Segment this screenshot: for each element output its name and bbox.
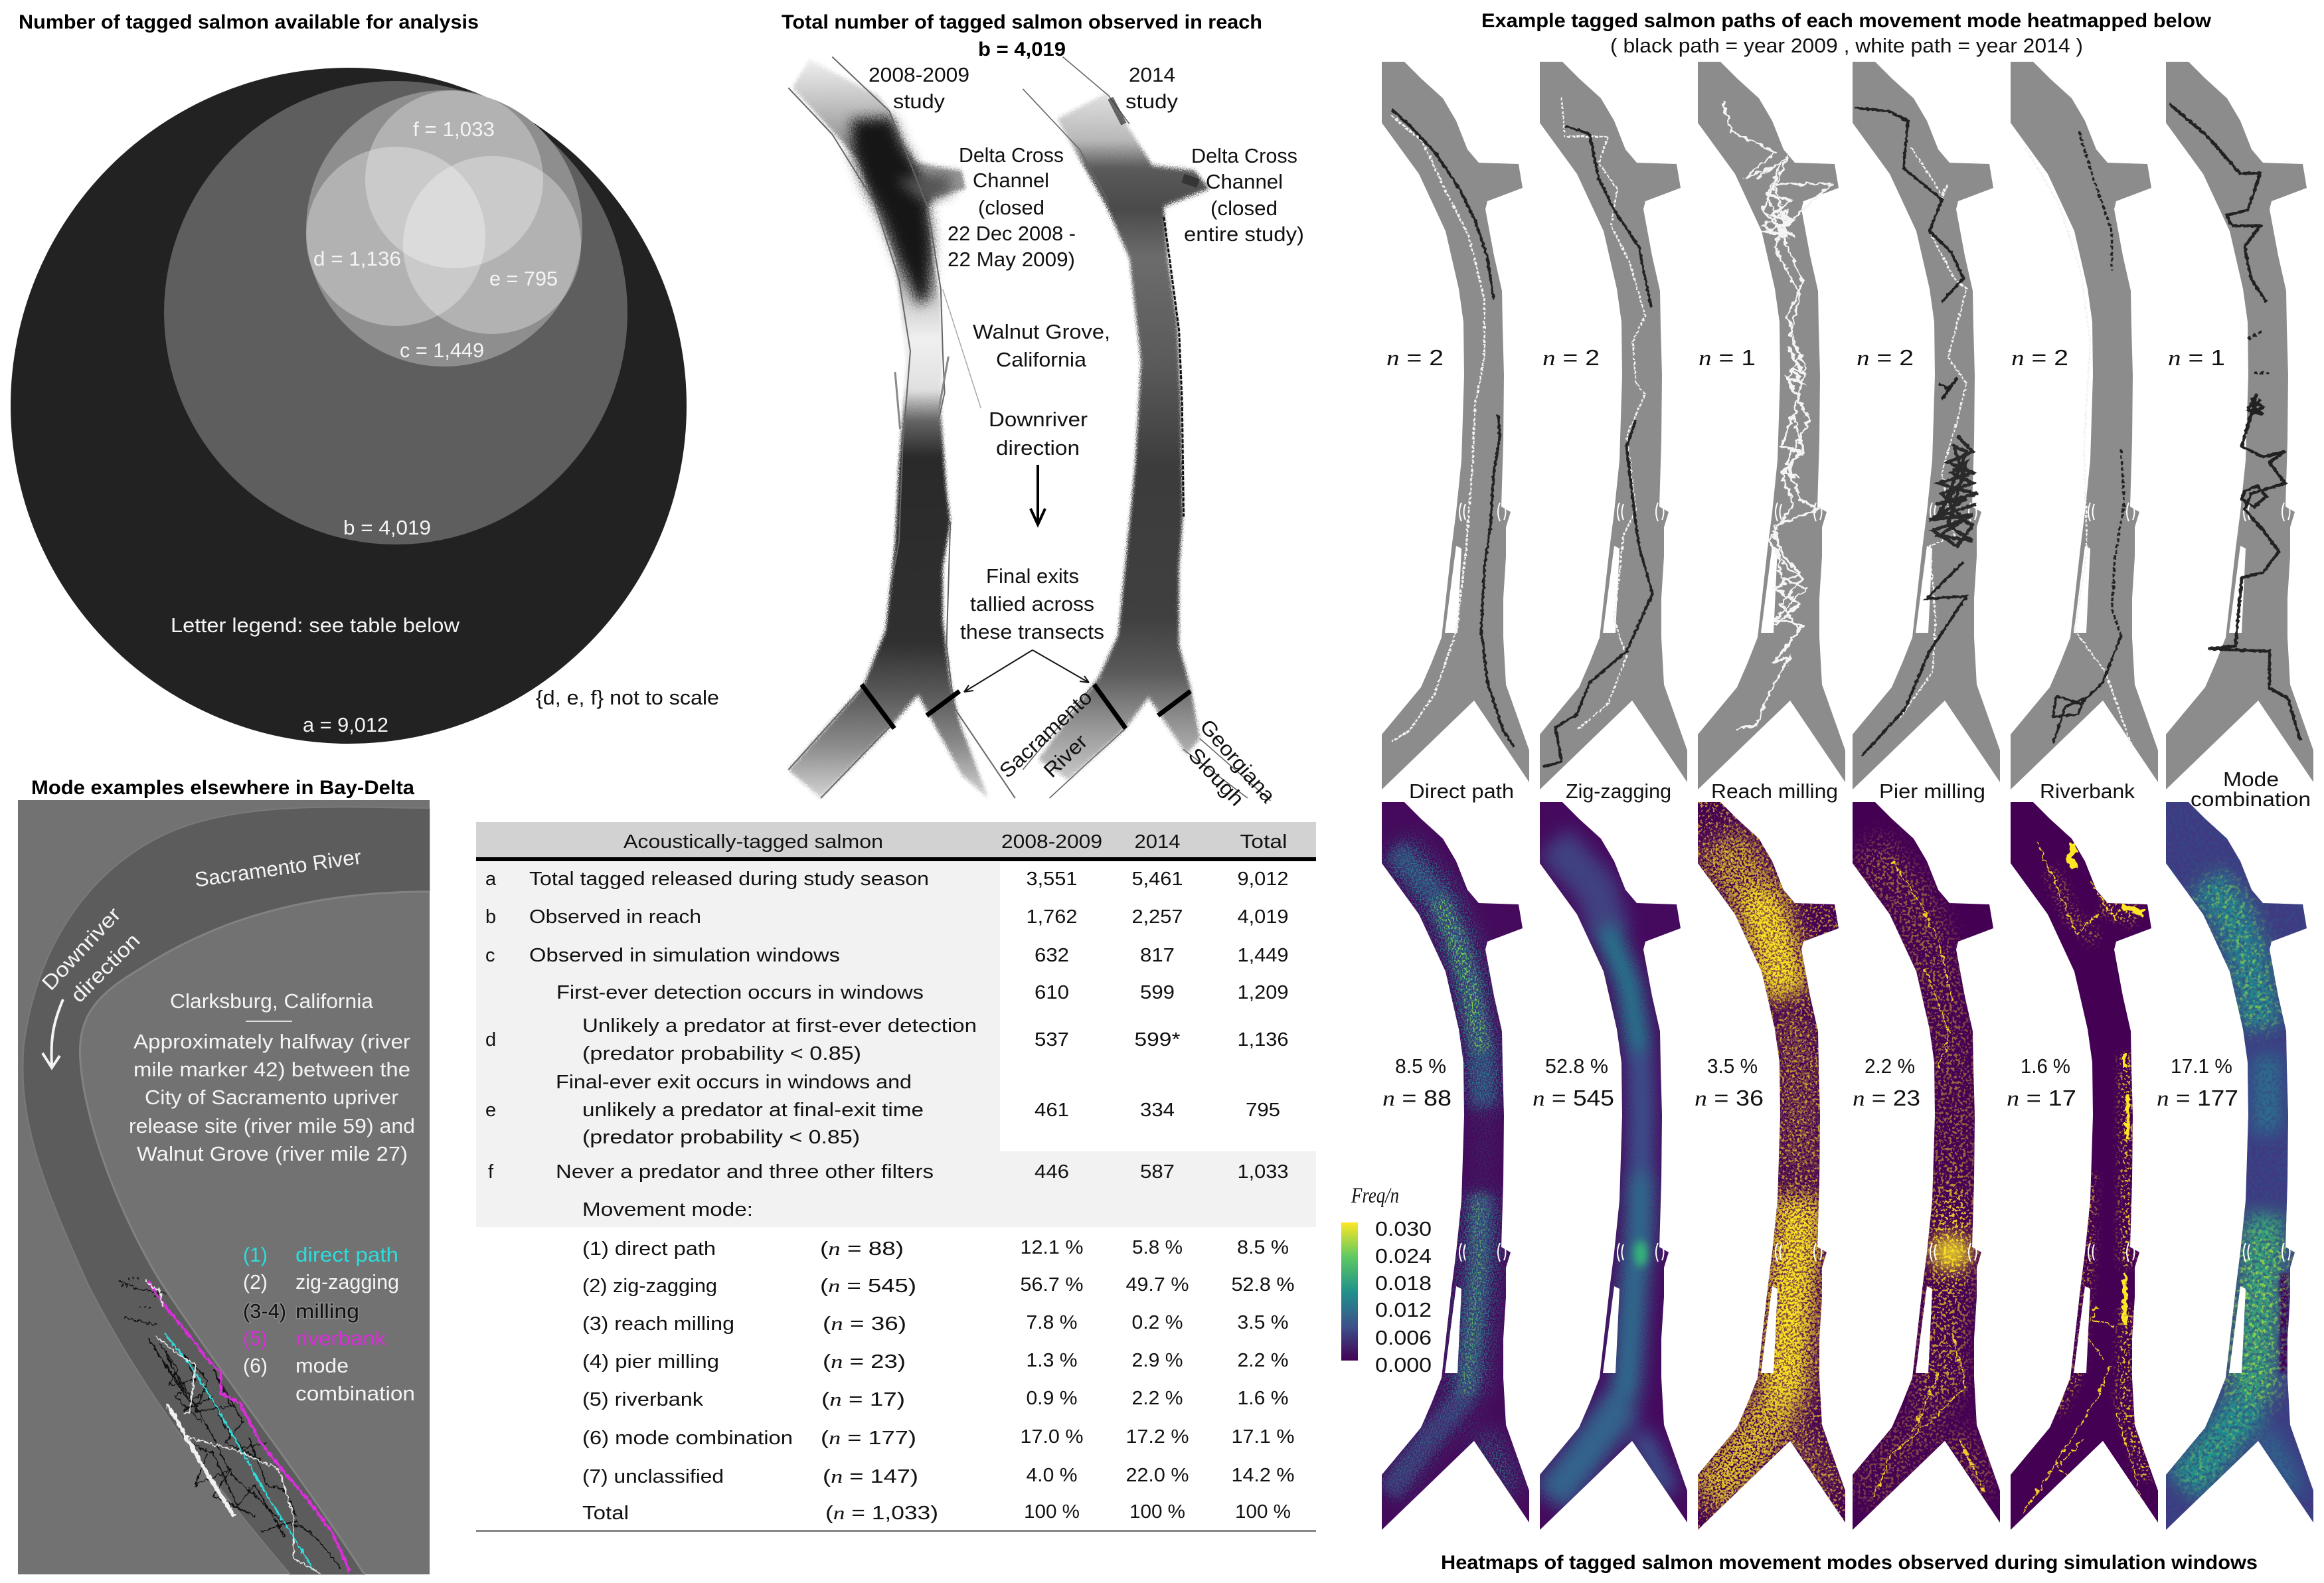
subheading: b count: b = 4,019 xyxy=(978,39,1066,60)
mode row 7: 14.2 % xyxy=(1231,1465,1295,1486)
row e: e xyxy=(485,1100,496,1121)
n labels on path panels xyxy=(1386,345,2225,371)
text block: Clarksburg location: mile marker 42) between the xyxy=(133,1058,410,1081)
row c: c xyxy=(485,945,495,966)
mode row 2: 56.7 % xyxy=(1020,1274,1084,1295)
legend: path colours: (5) xyxy=(243,1327,268,1350)
colour scale legend: 0.000 xyxy=(1375,1353,1432,1376)
row f: 587 xyxy=(1140,1161,1175,1183)
label: Delta Cross Channel closed dates: 22 Dec 2008 - xyxy=(948,222,1076,245)
mode labels: Zig-zagging xyxy=(1566,780,1671,803)
label e: e = 795 xyxy=(489,267,558,290)
panel: heatmaps xyxy=(1341,799,2322,1574)
text block: Clarksburg location: Clarksburg, California xyxy=(170,989,374,1013)
label: Georgiana Slough: Slough xyxy=(1184,743,1249,811)
row b: 2,257 xyxy=(1131,906,1183,928)
table shaded backgrounds xyxy=(476,862,1316,1227)
row d: 599* xyxy=(1134,1029,1181,1050)
mode row 1: (1) direct path xyxy=(582,1238,716,1260)
mode row 2 xyxy=(582,1274,1295,1297)
label: final exits: these transects xyxy=(960,620,1104,643)
row a: Total tagged released during study season xyxy=(529,869,929,890)
legend: path colours xyxy=(243,1243,415,1405)
label: Delta Cross Channel closed dates: (closed xyxy=(978,196,1044,219)
label: Delta Cross Channel closed dates: Delta Cross xyxy=(959,143,1064,167)
label f: f = 1,033 xyxy=(413,118,495,141)
text block: Clarksburg location: Walnut Grove (river mile 27) xyxy=(137,1142,408,1165)
mode labels xyxy=(1409,768,2311,811)
text block: Clarksburg location: City of Sacramento upriver xyxy=(145,1086,398,1109)
heatmap percent and n labels: n = 545 xyxy=(1533,1086,1614,1111)
mode row 6: 17.1 % xyxy=(1231,1426,1295,1448)
heatmap: reach milling xyxy=(1695,799,1854,1536)
table header: Acoustically-tagged salmon xyxy=(623,831,883,853)
n labels on path panels: n = 1 xyxy=(1699,345,1756,371)
total row xyxy=(582,1501,1291,1524)
n labels on path panels: n = 2 xyxy=(1386,345,1444,371)
paths: reach milling xyxy=(1722,100,1831,730)
row b: b xyxy=(485,906,496,928)
label a: a = 9,012 xyxy=(303,713,388,736)
row e: unlikely a predator at final-exit time xyxy=(582,1100,924,1121)
arrow: downriver xyxy=(1031,465,1045,525)
paths: zig-zagging xyxy=(1543,97,1653,767)
label: final exits: tallied across xyxy=(970,592,1094,616)
subheading: path colour key: ( black path = year 2009 , white path = year 2014 ) xyxy=(1610,34,2083,57)
mode row 5 xyxy=(582,1388,1288,1410)
heatmap percent and n labels: 3.5 % xyxy=(1707,1054,1758,1078)
heatmap: mode combination xyxy=(2163,799,2322,1536)
circle e xyxy=(403,156,581,334)
row e: 795 xyxy=(1246,1100,1280,1121)
circle a xyxy=(11,68,687,744)
row first-ever detection: 1,209 xyxy=(1238,982,1288,1003)
label d: d = 1,136 xyxy=(313,247,401,270)
label: Delta Cross Channel closed entire study xyxy=(1184,144,1304,246)
row e: 461 xyxy=(1035,1100,1069,1121)
mode row 2: (n = 545) xyxy=(820,1276,916,1297)
mode labels: Mode xyxy=(2223,768,2279,791)
panel: mode examples elsewhere in Bay-Delta xyxy=(18,777,430,1574)
legend: path colours: (6) xyxy=(243,1354,268,1377)
row c: 1,449 xyxy=(1238,945,1288,966)
mode row 2: 49.7 % xyxy=(1126,1274,1189,1295)
paths: mode combination xyxy=(2169,104,2300,740)
heading: mode examples: Mode examples elsewhere in Bay-Delta xyxy=(31,777,414,799)
labels: 2014 study: study xyxy=(1125,90,1179,113)
table header: 2014 xyxy=(1134,831,1181,853)
heatmap: zig-zagging xyxy=(1536,799,1696,1536)
mode labels: Reach milling xyxy=(1711,780,1838,803)
row d: (predator probability < 0.85) xyxy=(582,1043,861,1064)
transect bars xyxy=(862,685,1191,728)
row d: 537 xyxy=(1035,1029,1069,1050)
mode row 1: 5.8 % xyxy=(1132,1237,1183,1258)
mode labels: combination xyxy=(2191,788,2311,811)
scale note: {d, e, f} not to scale xyxy=(536,686,719,709)
label: Delta Cross Channel closed dates: Channel xyxy=(973,169,1049,192)
mode row 4: 2.2 % xyxy=(1238,1350,1288,1371)
label: Walnut Grove xyxy=(973,320,1110,371)
mode row 2: 52.8 % xyxy=(1231,1274,1295,1295)
colour scale legend: 0.024 xyxy=(1375,1244,1432,1268)
row first-ever detection: 610 xyxy=(1035,982,1069,1003)
label: downriver direction: direction xyxy=(996,436,1080,459)
row d xyxy=(485,1015,1288,1064)
mode row 7: 22.0 % xyxy=(1126,1465,1189,1486)
mode row 3: (3) reach milling xyxy=(582,1313,734,1335)
legend: path colours: (1) xyxy=(243,1243,268,1266)
row c: Observed in simulation windows xyxy=(529,945,840,966)
label: final exits: Final exits xyxy=(986,564,1079,588)
mode row 7 xyxy=(582,1465,1295,1487)
total row: 100 % xyxy=(1129,1501,1185,1523)
row f xyxy=(488,1161,1288,1183)
panel: total observed in reach xyxy=(782,11,1304,811)
mode labels: Pier milling xyxy=(1879,780,1985,803)
total row: 100 % xyxy=(1235,1501,1291,1523)
panel: nested circles of tagged salmon counts xyxy=(11,11,719,744)
colour scale legend: 0.030 xyxy=(1375,1217,1432,1240)
row a: 9,012 xyxy=(1238,869,1288,890)
total row: Total xyxy=(582,1503,629,1524)
text block: Clarksburg location xyxy=(129,989,415,1165)
mode labels: Riverbank xyxy=(2040,780,2135,803)
label: Georgiana Slough: Georgiana xyxy=(1195,715,1280,807)
heatmap percent and n labels: n = 17 xyxy=(2007,1086,2076,1111)
mode row 3: 3.5 % xyxy=(1238,1312,1288,1333)
table header: 2008-2009 xyxy=(1001,831,1102,853)
mode row 3: 7.8 % xyxy=(1027,1312,1077,1333)
label: Sacramento River: Sacramento xyxy=(995,685,1096,782)
label c: c = 1,449 xyxy=(400,339,484,362)
mode row 6 xyxy=(582,1426,1295,1449)
row d: Unlikely a predator at first-ever detection xyxy=(582,1015,977,1037)
mode row 2: (2) zig-zagging xyxy=(582,1276,717,1297)
legend: path colours: (3-4) xyxy=(243,1299,286,1323)
heatmap percent and n labels xyxy=(1382,1054,2238,1111)
row d: 1,136 xyxy=(1238,1029,1288,1050)
n labels on path panels: n = 2 xyxy=(1857,345,1914,371)
n labels on path panels: n = 2 xyxy=(2011,345,2068,371)
panel: table of acoustically-tagged salmon xyxy=(476,822,1316,1532)
legend: path colours: zig-zagging xyxy=(295,1270,399,1293)
label: Delta Cross Channel closed entire study: Channel xyxy=(1206,170,1283,193)
row d: d xyxy=(485,1029,496,1050)
colour scale legend: 0.018 xyxy=(1375,1272,1432,1295)
heatmap: riverbank xyxy=(2007,799,2167,1536)
river density map: 2014 xyxy=(1023,57,1270,801)
row b xyxy=(485,906,1288,928)
label: final exits xyxy=(960,564,1104,643)
label: Sacramento River on map: Sacramento River xyxy=(193,845,363,892)
heatmap percent and n labels: 1.6 % xyxy=(2021,1054,2070,1078)
colour scale legend: Freq/n xyxy=(1351,1184,1399,1208)
heatmap percent and n labels: n = 23 xyxy=(1853,1086,1920,1111)
row e: Final-ever exit occurs in windows and xyxy=(556,1072,912,1093)
labels: 2008-2009 study: study xyxy=(893,90,946,113)
row e: 334 xyxy=(1140,1100,1175,1121)
n labels on path panels: n = 2 xyxy=(1542,345,1600,371)
heading: example paths: Example tagged salmon paths of each movement mode heatmapped below xyxy=(1481,10,2212,32)
circle f xyxy=(365,90,543,268)
table bottom rule xyxy=(476,1530,1316,1532)
mode labels: Direct path xyxy=(1409,780,1514,803)
mode row 5: 2.2 % xyxy=(1131,1388,1183,1409)
text block: Clarksburg location: Approximately halfway (river xyxy=(133,1030,410,1053)
mode row 3 xyxy=(582,1312,1288,1335)
row b: Observed in reach xyxy=(529,906,701,928)
heatmap percent and n labels: 2.2 % xyxy=(1865,1054,1915,1078)
labels: 2008-2009 study xyxy=(869,63,969,113)
label: Walnut Grove: California xyxy=(996,348,1087,371)
mode row 3: (n = 36) xyxy=(823,1313,906,1335)
colour scale legend: 0.006 xyxy=(1375,1326,1432,1349)
arrows: to transects xyxy=(964,650,1089,692)
river bend xyxy=(23,807,430,1574)
mode row 7: 4.0 % xyxy=(1027,1465,1077,1486)
paths: direct path xyxy=(1392,110,1514,747)
label: Delta Cross Channel closed entire study: Delta Cross xyxy=(1191,144,1297,167)
mode row 3: 0.2 % xyxy=(1131,1312,1183,1333)
row a: 5,461 xyxy=(1131,869,1183,890)
table header: Total xyxy=(1240,831,1287,853)
row b: 1,762 xyxy=(1027,906,1077,928)
legend: path colours: combination xyxy=(295,1382,415,1405)
row c: 632 xyxy=(1035,945,1069,966)
mode row 1: (n = 88) xyxy=(820,1238,904,1260)
panel: example paths xyxy=(1382,10,2313,811)
heatmap: pier milling xyxy=(1849,799,2009,1536)
table header xyxy=(476,822,1316,861)
mode row 6: 17.0 % xyxy=(1020,1426,1084,1448)
heatmap percent and n labels: 8.5 % xyxy=(1395,1054,1446,1078)
mode row 4: (4) pier milling xyxy=(582,1351,719,1373)
letter legend note: Letter legend: see table below xyxy=(171,614,460,637)
legend: path colours: mode xyxy=(295,1354,349,1377)
river outlines: six grey panels xyxy=(1382,62,2313,790)
n labels on path panels: n = 1 xyxy=(2168,345,2225,371)
heatmap percent and n labels: 17.1 % xyxy=(2171,1054,2232,1078)
heading: number of tagged salmon: Number of tagged salmon available for analysis xyxy=(19,11,479,33)
row c xyxy=(485,945,1288,966)
total row: (n = 1,033) xyxy=(825,1503,938,1524)
mode row 5: 1.6 % xyxy=(1238,1388,1288,1409)
heatmap: direct path xyxy=(1378,799,1538,1536)
label: downriver direction: Downriver xyxy=(989,408,1088,431)
heatmap percent and n labels: n = 36 xyxy=(1695,1086,1764,1111)
row f: 1,033 xyxy=(1238,1161,1288,1183)
row first-ever detection: First-ever detection occurs in windows xyxy=(556,982,924,1003)
mode row 4: 2.9 % xyxy=(1131,1350,1183,1371)
text block: Clarksburg location: release site (river mile 59) and xyxy=(129,1114,415,1137)
row a: a xyxy=(485,869,497,890)
mode row 5: 0.9 % xyxy=(1027,1388,1077,1409)
movement mode subheading: Movement mode: xyxy=(582,1199,753,1220)
circle b xyxy=(164,81,627,544)
mode row 4: 1.3 % xyxy=(1027,1350,1077,1371)
heatmap percent and n labels: n = 177 xyxy=(2157,1086,2238,1111)
label: Walnut Grove: Walnut Grove, xyxy=(973,320,1110,343)
label: Delta Cross Channel closed dates xyxy=(948,143,1076,271)
heading: heatmaps footer: Heatmaps of tagged salmon movement modes observed during simulation windows xyxy=(1441,1552,2258,1574)
label: Delta Cross Channel closed entire study: (closed xyxy=(1210,197,1278,220)
labels: 2014 study: 2014 xyxy=(1129,63,1175,86)
paths: pier milling xyxy=(1854,108,1976,756)
paths: riverbank xyxy=(2025,131,2133,751)
row a: 3,551 xyxy=(1027,869,1077,890)
mode row 4 xyxy=(582,1350,1288,1373)
row c: 817 xyxy=(1140,945,1175,966)
legend: path colours: riverbank xyxy=(295,1327,386,1350)
row a xyxy=(485,869,1288,890)
mode row 7: (7) unclassified xyxy=(582,1466,724,1487)
mode row 1: 12.1 % xyxy=(1020,1237,1084,1258)
label: Sacramento River: River xyxy=(1039,730,1092,782)
row first-ever detection: 599 xyxy=(1140,982,1175,1003)
mode row 1 xyxy=(582,1237,1289,1260)
label: downriver direction xyxy=(989,408,1088,459)
row first-ever detection xyxy=(556,982,1288,1003)
row f: 446 xyxy=(1035,1161,1069,1183)
heatmap percent and n labels: 52.8 % xyxy=(1545,1054,1608,1078)
total row: 100 % xyxy=(1024,1501,1080,1523)
legend: path colours: milling xyxy=(295,1299,359,1323)
row f: Never a predator and three other filters xyxy=(556,1161,934,1183)
circle c xyxy=(306,90,582,367)
label: Delta Cross Channel closed dates: 22 May 2009) xyxy=(948,248,1075,271)
mode row 7: (n = 147) xyxy=(823,1466,918,1487)
colour scale legend xyxy=(1341,1184,1432,1376)
mode row 5: (5) riverbank xyxy=(582,1389,704,1410)
label b: b = 4,019 xyxy=(343,516,431,539)
label: Delta Cross Channel closed entire study: entire study) xyxy=(1184,222,1304,246)
mode row 6: 17.2 % xyxy=(1126,1426,1189,1448)
mode row 5: (n = 17) xyxy=(821,1389,905,1410)
circle d xyxy=(306,147,485,326)
background map xyxy=(18,800,430,1574)
labels: 2008-2009 study: 2008-2009 xyxy=(869,63,969,86)
row e xyxy=(485,1072,1280,1148)
river density map: 2008-2009 xyxy=(788,57,1015,798)
colour scale legend: 0.012 xyxy=(1375,1298,1432,1321)
arrow: curved downriver xyxy=(42,999,63,1068)
row b: 4,019 xyxy=(1238,906,1288,928)
mode row 1: 8.5 % xyxy=(1237,1237,1289,1258)
row e: (predator probability < 0.85) xyxy=(582,1127,860,1148)
mode row 6: (n = 177) xyxy=(821,1428,916,1449)
legend: path colours: direct path xyxy=(295,1243,398,1266)
label: Downriver direction on map: Downriver xyxy=(37,902,125,995)
heading: total number observed: Total number of tagged salmon observed in reach xyxy=(782,11,1262,33)
label: Downriver direction on map: direction xyxy=(66,929,145,1007)
mode row 6: (6) mode combination xyxy=(582,1428,793,1449)
heatmap percent and n labels: n = 88 xyxy=(1382,1086,1452,1111)
movement paths on the river xyxy=(119,1278,350,1574)
labels: 2014 study xyxy=(1125,63,1179,113)
legend: path colours: (2) xyxy=(243,1270,268,1293)
label: Downriver direction on map xyxy=(37,902,145,1007)
row f: f xyxy=(488,1161,494,1183)
mode row 4: (n = 23) xyxy=(823,1351,906,1373)
